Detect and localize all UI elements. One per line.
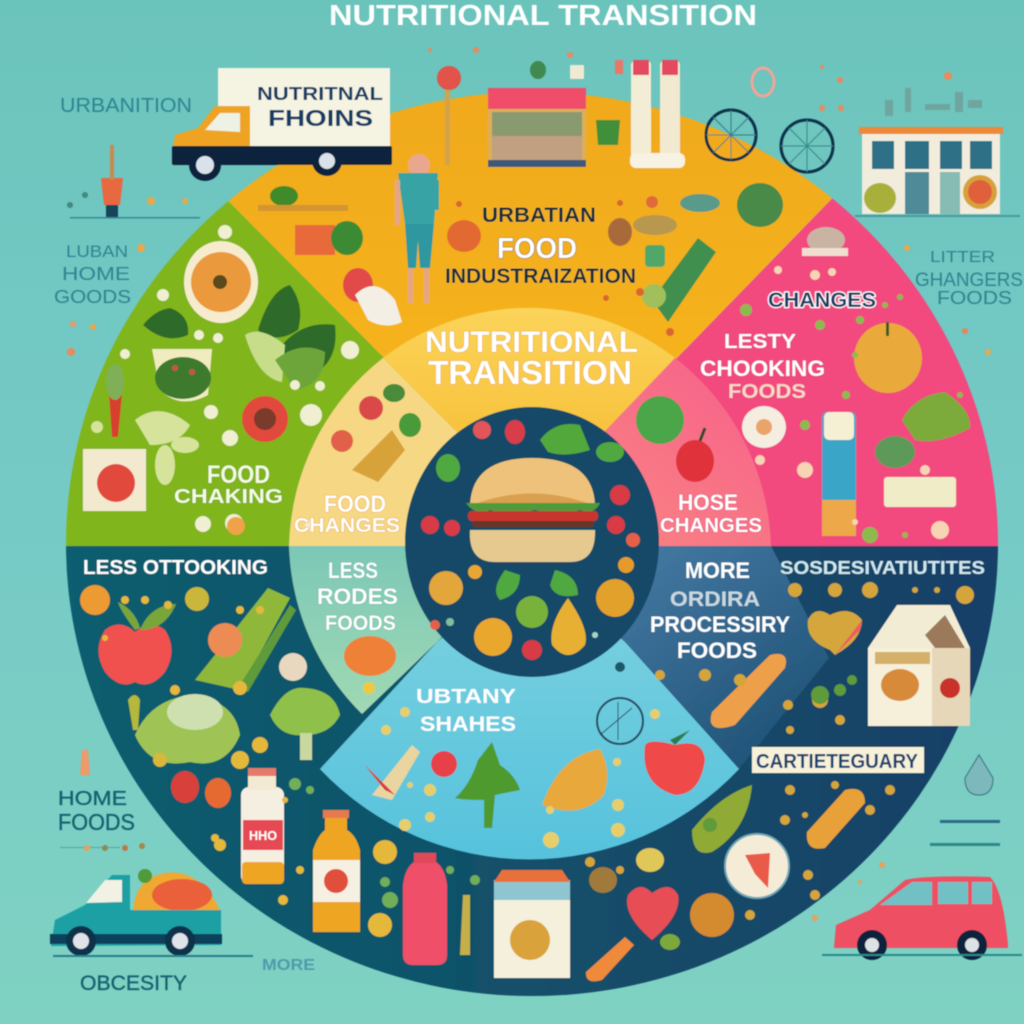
icon: orange drop	[80, 750, 90, 775]
text: home foods: HOME	[58, 788, 127, 810]
panel: dark navy right items	[585, 558, 985, 981]
car windows	[880, 882, 992, 905]
left side: urbanization label: URBANITION	[60, 95, 192, 117]
pickup cargo	[133, 872, 221, 912]
left side dots	[67, 244, 145, 356]
panel: right lower items	[812, 755, 1000, 921]
baguette	[711, 654, 786, 728]
icon: water drop	[965, 755, 993, 795]
fruits	[128, 695, 231, 808]
panel: pink sector	[676, 198, 999, 547]
milk carton	[868, 605, 970, 726]
panel: lower left labels	[58, 750, 145, 851]
car wheels	[857, 930, 987, 960]
text: hose changes	[660, 490, 762, 537]
lettuce tree	[270, 688, 340, 760]
panel: delivery truck	[172, 68, 392, 181]
icon: baguette	[372, 745, 420, 800]
text: lesty chooking foods	[700, 331, 825, 403]
truck cab	[173, 106, 250, 165]
text: urbany shahes: SHAHES	[420, 713, 516, 736]
text: food chaking: FOOD	[207, 461, 270, 489]
milk bottle	[241, 768, 284, 884]
panel: green sector food items	[83, 225, 359, 535]
truck label	[257, 84, 383, 131]
right label: litter changers foods: LITTER	[930, 249, 995, 266]
yellow sector text: INDUSTRAIZATION	[445, 265, 636, 288]
text: less rodes foods	[317, 558, 398, 635]
greens top left	[258, 186, 363, 255]
inner ring: tan segment	[289, 358, 532, 546]
text: less rodes foods: RODES	[317, 584, 398, 609]
truck wheels	[189, 146, 342, 181]
storefront	[488, 88, 586, 167]
icon: sign	[437, 66, 461, 165]
icon: ring	[752, 68, 774, 96]
text: lesty chooking foods: CHOOKING	[700, 356, 825, 381]
milk bottle	[822, 412, 856, 536]
cartieteguary label: CARTIETEGUARY	[756, 751, 919, 773]
blue small items	[381, 707, 660, 848]
panel: dark teal left items	[80, 557, 570, 978]
orange dots	[812, 862, 885, 921]
yellow sector text: URBATIAN	[482, 204, 596, 227]
panel: mid blue ring text	[650, 558, 790, 663]
icon: bicycle wheels	[706, 110, 833, 172]
bread plate	[802, 227, 848, 256]
pickup wheels	[66, 926, 195, 956]
stand	[460, 895, 470, 955]
text: lesty chooking foods: FOODS	[728, 381, 806, 403]
panel: ring tan items	[294, 384, 421, 537]
icon: small figure	[67, 145, 200, 218]
navy small items	[585, 582, 974, 920]
left side label: luban home goods: GOODS	[54, 287, 131, 307]
carton	[494, 870, 570, 978]
carrot	[106, 364, 124, 437]
pink small items	[740, 294, 963, 543]
green cabbage	[636, 396, 684, 444]
left side label: luban home goods	[54, 242, 131, 307]
text: less rodes foods: FOODS	[325, 612, 396, 635]
orange fruit	[854, 322, 922, 393]
greens sprig	[692, 785, 752, 853]
orange fruit	[80, 585, 110, 615]
panel: mid blue ring text: FOODS	[677, 638, 757, 663]
small caption line	[930, 820, 1000, 846]
plate	[725, 834, 789, 898]
text: food chaking	[174, 461, 283, 508]
text: home foods	[58, 788, 135, 835]
bread stick	[807, 789, 865, 849]
pizza	[184, 241, 258, 323]
store rooftop scribbles	[885, 88, 982, 116]
greens top right	[608, 183, 783, 267]
panel: yellow sector items	[258, 60, 783, 391]
text: more: MORE	[262, 957, 315, 974]
truck label: NUTRITNAL	[257, 84, 383, 104]
yellow sector text: FOOD	[497, 233, 577, 265]
center circle with burger	[405, 407, 659, 677]
heart small	[627, 887, 678, 940]
butter bar	[884, 477, 956, 507]
floating dots	[428, 47, 952, 111]
small grain items	[102, 596, 397, 937]
salad	[135, 694, 240, 767]
ring title	[425, 326, 638, 391]
icon: green leaf	[455, 742, 520, 828]
panel: red car	[822, 876, 1022, 960]
right label: litter changers foods	[915, 249, 1023, 308]
apple	[676, 428, 714, 482]
burger	[466, 458, 600, 562]
heart	[808, 611, 862, 655]
panel: mid blue ring text: PROCESSIRY	[650, 612, 790, 637]
milk bottle: HHO	[249, 828, 277, 843]
right label: litter changers foods: FOODS	[937, 288, 1012, 308]
ring title: TRANSITION	[428, 354, 632, 391]
right label: litter changers foods: GHANGERS	[915, 270, 1023, 291]
text: food changes: FOOD	[324, 491, 386, 518]
title: NUTRITIONAL TRANSITION	[329, 0, 757, 32]
icon: pastry	[542, 749, 607, 811]
inner ring: light teal segment	[289, 546, 532, 714]
store building	[862, 130, 1000, 214]
mushroom	[279, 653, 307, 681]
yellow sector dots	[456, 200, 674, 336]
left side label: luban home goods: LUBAN	[66, 242, 128, 261]
greens	[143, 285, 336, 378]
tubes	[630, 60, 685, 168]
green sector small items	[120, 225, 359, 532]
ring title: NUTRITIONAL	[425, 326, 638, 359]
plant	[596, 120, 620, 145]
store door and planters	[864, 172, 997, 214]
food packet	[83, 449, 146, 511]
panel: top floating items	[428, 47, 952, 172]
icon: leafy	[530, 61, 546, 79]
center food items	[421, 420, 640, 660]
person	[395, 154, 439, 303]
panel: pink sector items	[700, 227, 970, 543]
text: home foods: FOODS	[58, 809, 135, 835]
panel: dark teal sector	[65, 545, 999, 997]
icon: tomato	[644, 730, 705, 795]
panel: light teal ring items	[317, 558, 398, 694]
center dark disc	[405, 407, 659, 677]
green lettuce	[875, 392, 970, 468]
inner ring: yellow segment	[383, 308, 675, 507]
text: changes: CHANGES	[768, 289, 876, 312]
leek	[642, 238, 716, 322]
yellow sector text	[445, 204, 636, 288]
panel: mid blue ring text: MORE	[685, 558, 750, 583]
truck label: FHOINS	[268, 105, 373, 131]
truck box	[218, 68, 390, 146]
potato	[636, 848, 664, 872]
left side label: luban home goods: HOME	[62, 264, 130, 284]
panel: pickup truck	[50, 869, 253, 957]
plate	[742, 406, 786, 448]
text: food chaking: CHAKING	[174, 486, 283, 508]
inner ring: mid blue segment	[532, 546, 829, 769]
text: hose changes: HOSE	[678, 490, 738, 515]
spiral bun	[690, 893, 734, 937]
text: obcesity: OBCESITY	[80, 972, 187, 995]
red apple	[98, 602, 176, 684]
red bottle	[403, 853, 447, 965]
text: less cooking: LESS OTTOOKING	[83, 557, 268, 579]
tomato	[242, 396, 288, 442]
carrot	[586, 937, 634, 981]
inner ring: pink segment	[532, 358, 771, 546]
text: food changes	[294, 491, 400, 537]
text: less rodes foods: LESS	[328, 558, 378, 583]
salad bowl	[152, 349, 212, 401]
small orange tomato	[447, 220, 481, 252]
text: hose changes: CHANGES	[660, 515, 762, 537]
dots row	[60, 843, 145, 851]
panel: right store	[855, 88, 1020, 217]
icon: clock	[597, 698, 643, 744]
icon: red berry	[431, 751, 457, 777]
store roof	[859, 127, 1003, 134]
truck chassis	[172, 146, 392, 165]
text: urbany shahes	[416, 686, 517, 736]
car body	[834, 876, 1008, 948]
text: lesty chooking foods: LESTY	[724, 331, 797, 353]
text: food changes: CHANGES	[294, 515, 400, 537]
juice bottle	[313, 810, 360, 932]
capsule shape	[343, 268, 402, 326]
text: sosdesivatiutites: SOSDESIVATIUTITES	[780, 558, 985, 578]
store windows	[872, 141, 992, 169]
panel: green sector	[65, 200, 457, 547]
icon: orange slice	[344, 636, 396, 676]
panel: yellow sector	[228, 93, 832, 431]
panel: blue wedge items	[365, 662, 705, 848]
panel: mid blue ring text: ORDIRA	[670, 588, 760, 611]
inner ring: light blue segment	[320, 560, 739, 859]
panel: ring pink items	[636, 396, 762, 537]
text: urbany shahes: UBTANY	[416, 686, 517, 708]
asparagus stalks	[195, 588, 296, 692]
pickup body	[51, 875, 221, 946]
right side dots	[904, 245, 991, 355]
